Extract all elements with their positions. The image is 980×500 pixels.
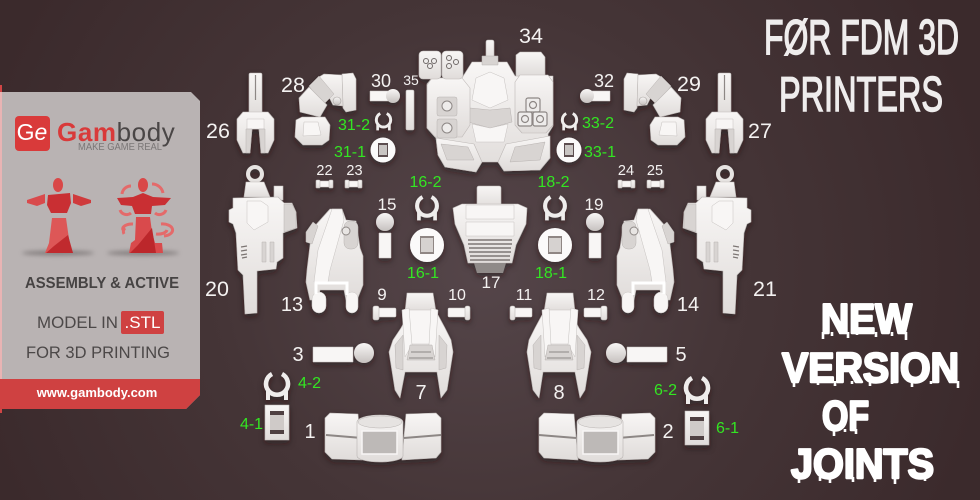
part 6-2: clip [686, 378, 708, 404]
white part numbers [205, 24, 777, 443]
label 4-1: 4-1 [240, 416, 263, 433]
label 27: 27 [748, 119, 772, 143]
right pod [515, 75, 553, 133]
label 18-1: 18-1 [535, 265, 567, 282]
part 19: ball peg mirrored [586, 213, 604, 258]
text: model in: MODEL IN [37, 314, 118, 332]
label 3: 3 [292, 344, 304, 366]
part 3: ball peg [313, 343, 374, 363]
bolt 25 [647, 180, 664, 188]
footer url: www.gambody.com [36, 385, 157, 400]
part 33-1: socket disc [556, 138, 582, 162]
missile racks [419, 51, 463, 79]
label 28: 28 [281, 73, 305, 97]
label 17: 17 [482, 273, 500, 292]
label 4-2: 4-2 [298, 375, 321, 392]
left pod [427, 78, 470, 137]
part 7: shin [389, 293, 453, 398]
part 35: rod [406, 90, 414, 130]
part 17: head [453, 186, 527, 273]
badge: .STL: .STL [125, 313, 160, 332]
label 26: 26 [206, 119, 230, 143]
title: for FDM 3D printers [764, 11, 959, 122]
bolt 12 [584, 306, 607, 320]
part 6-1: square socket [685, 411, 709, 445]
callout line: version: VERSION [782, 344, 959, 391]
logo icon [15, 116, 50, 151]
part 15: ball peg [376, 213, 394, 258]
label 11: 11 [516, 287, 532, 304]
bolt 24 [618, 180, 635, 188]
label 31-2: 31-2 [338, 117, 370, 134]
torso lower left [436, 138, 482, 172]
part 16-2: clip [417, 197, 437, 220]
callout line: joints: JOINTS [791, 440, 934, 487]
part 30: ball peg [370, 89, 400, 103]
label 16-1: 16-1 [407, 265, 439, 282]
bolt 22 [316, 180, 333, 188]
label 6-2: 6-2 [654, 382, 677, 399]
card footer band [0, 379, 200, 409]
label 14: 14 [677, 294, 699, 316]
callout line: new: NEW [821, 295, 912, 342]
torso antenna [482, 40, 498, 65]
part 31-2: clip [376, 114, 391, 130]
part 27: knee joint mirrored [706, 73, 743, 153]
label 12: 12 [587, 287, 605, 304]
part 29: shoulder mirrored [624, 73, 685, 145]
logo wordmark: Gambody [57, 117, 175, 147]
bolt 9 [373, 306, 396, 320]
torso silhouette [427, 62, 553, 172]
label 9: 9 [377, 285, 387, 304]
part 32: ball peg mirrored [580, 89, 610, 103]
torso head [468, 72, 512, 142]
part 16-1: socket disc [410, 228, 444, 262]
bolt 11 [510, 306, 532, 320]
label 25: 25 [647, 163, 663, 179]
part 34: torso [419, 40, 553, 172]
label 24: 24 [618, 163, 634, 179]
icon: articulated figure with rotation arrows [107, 178, 179, 256]
part 26: knee joint [237, 73, 274, 153]
label 23: 23 [346, 163, 363, 179]
part 1: hip ring [325, 413, 441, 462]
bolt 23 [345, 180, 362, 188]
label 32: 32 [594, 71, 614, 91]
part 2: hip ring mirrored [539, 413, 655, 462]
card edge strip [0, 85, 2, 413]
logo tagline: MAKE GAME REAL [78, 141, 162, 153]
card body [2, 92, 200, 409]
text: for 3D printing: FOR 3D PRINTING [26, 344, 170, 362]
right pod top [516, 52, 545, 76]
part 14: leg armour mirrored [617, 209, 674, 313]
panel: Gambody brand card [0, 85, 200, 413]
label 16-2: 16-2 [409, 174, 442, 191]
logo icon: Ge [17, 119, 47, 145]
callout: new version of joints [782, 295, 959, 487]
torso lower right [498, 136, 550, 171]
icon: static figure [22, 178, 94, 256]
label 20: 20 [205, 277, 229, 301]
label 33-1: 33-1 [584, 144, 616, 161]
label 18-2: 18-2 [537, 174, 570, 191]
left pod details [437, 97, 457, 138]
label 31-1: 31-1 [334, 144, 366, 161]
part 13: leg armour [306, 209, 363, 313]
label 29: 29 [677, 72, 701, 96]
label 21: 21 [753, 277, 777, 301]
part 20: arm gun [229, 167, 297, 314]
badge: .STL [121, 311, 164, 334]
green joint numbers [240, 115, 739, 437]
label 34: 34 [519, 24, 543, 48]
part 21: arm gun mirrored [683, 167, 751, 314]
label 1: 1 [304, 421, 316, 443]
label 10: 10 [448, 287, 466, 304]
part 5: ball peg mirrored [606, 343, 667, 363]
label 2: 2 [662, 421, 674, 443]
part 8: shin mirrored [527, 293, 591, 398]
parts layout [229, 40, 751, 462]
label 7: 7 [415, 382, 427, 404]
label 5: 5 [675, 344, 687, 366]
label 15: 15 [378, 195, 396, 214]
label 6-1: 6-1 [716, 420, 739, 437]
right pod launchers [518, 98, 547, 126]
part 18-2: clip [545, 197, 565, 220]
callout line: of: OF [822, 392, 869, 439]
label 8: 8 [553, 382, 565, 404]
part 4-1: square socket [265, 405, 289, 440]
label 13: 13 [281, 294, 303, 316]
text: assembly and active: ASSEMBLY & ACTIVE [25, 275, 179, 292]
bolt 10 [448, 306, 470, 320]
part 33-2: clip [562, 114, 577, 130]
part 4-2: clip [266, 374, 288, 400]
label 30: 30 [371, 71, 391, 91]
part 18-1: socket disc [538, 228, 572, 262]
part 28: shoulder [295, 73, 356, 145]
label 19: 19 [585, 195, 603, 214]
label 33-2: 33-2 [582, 115, 614, 132]
label 35: 35 [403, 72, 419, 88]
label 22: 22 [316, 163, 333, 179]
part 31-1: socket disc [370, 138, 396, 162]
